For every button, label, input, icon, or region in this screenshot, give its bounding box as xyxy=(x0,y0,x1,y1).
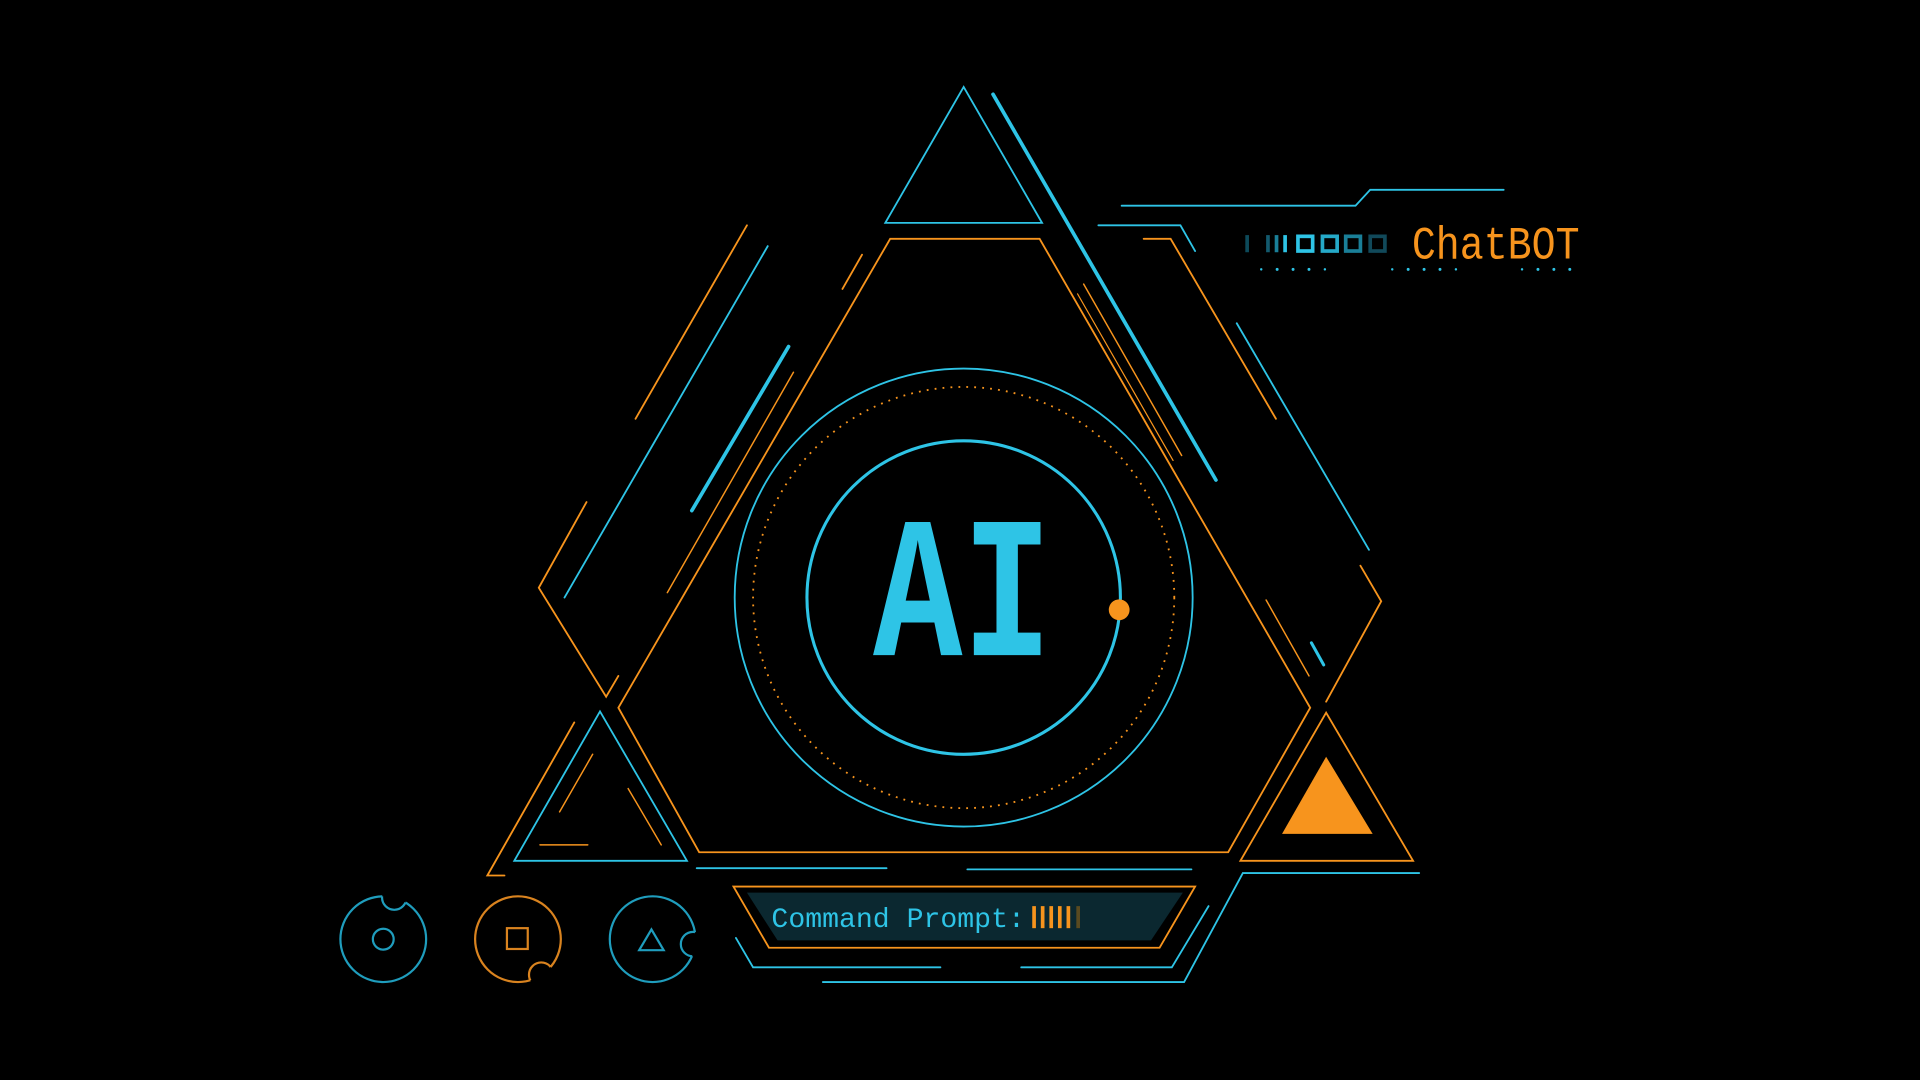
command prompt box xyxy=(733,887,1195,948)
icon: square button xyxy=(475,896,561,987)
frame: orange hexagon xyxy=(618,239,1310,852)
icon: filled orange triangle xyxy=(1282,757,1373,834)
main hud graphic xyxy=(339,85,1578,984)
icon: triangle button xyxy=(610,896,705,982)
AI title: AI xyxy=(873,487,1052,716)
icon: circle button xyxy=(340,885,426,982)
frame: accent lines xyxy=(487,87,1504,982)
ChatBOT label xyxy=(1245,219,1580,272)
central ring xyxy=(735,369,1193,827)
ChatBOT label: ChatBOT xyxy=(1412,219,1580,272)
command prompt box: Command Prompt: xyxy=(771,905,1025,936)
